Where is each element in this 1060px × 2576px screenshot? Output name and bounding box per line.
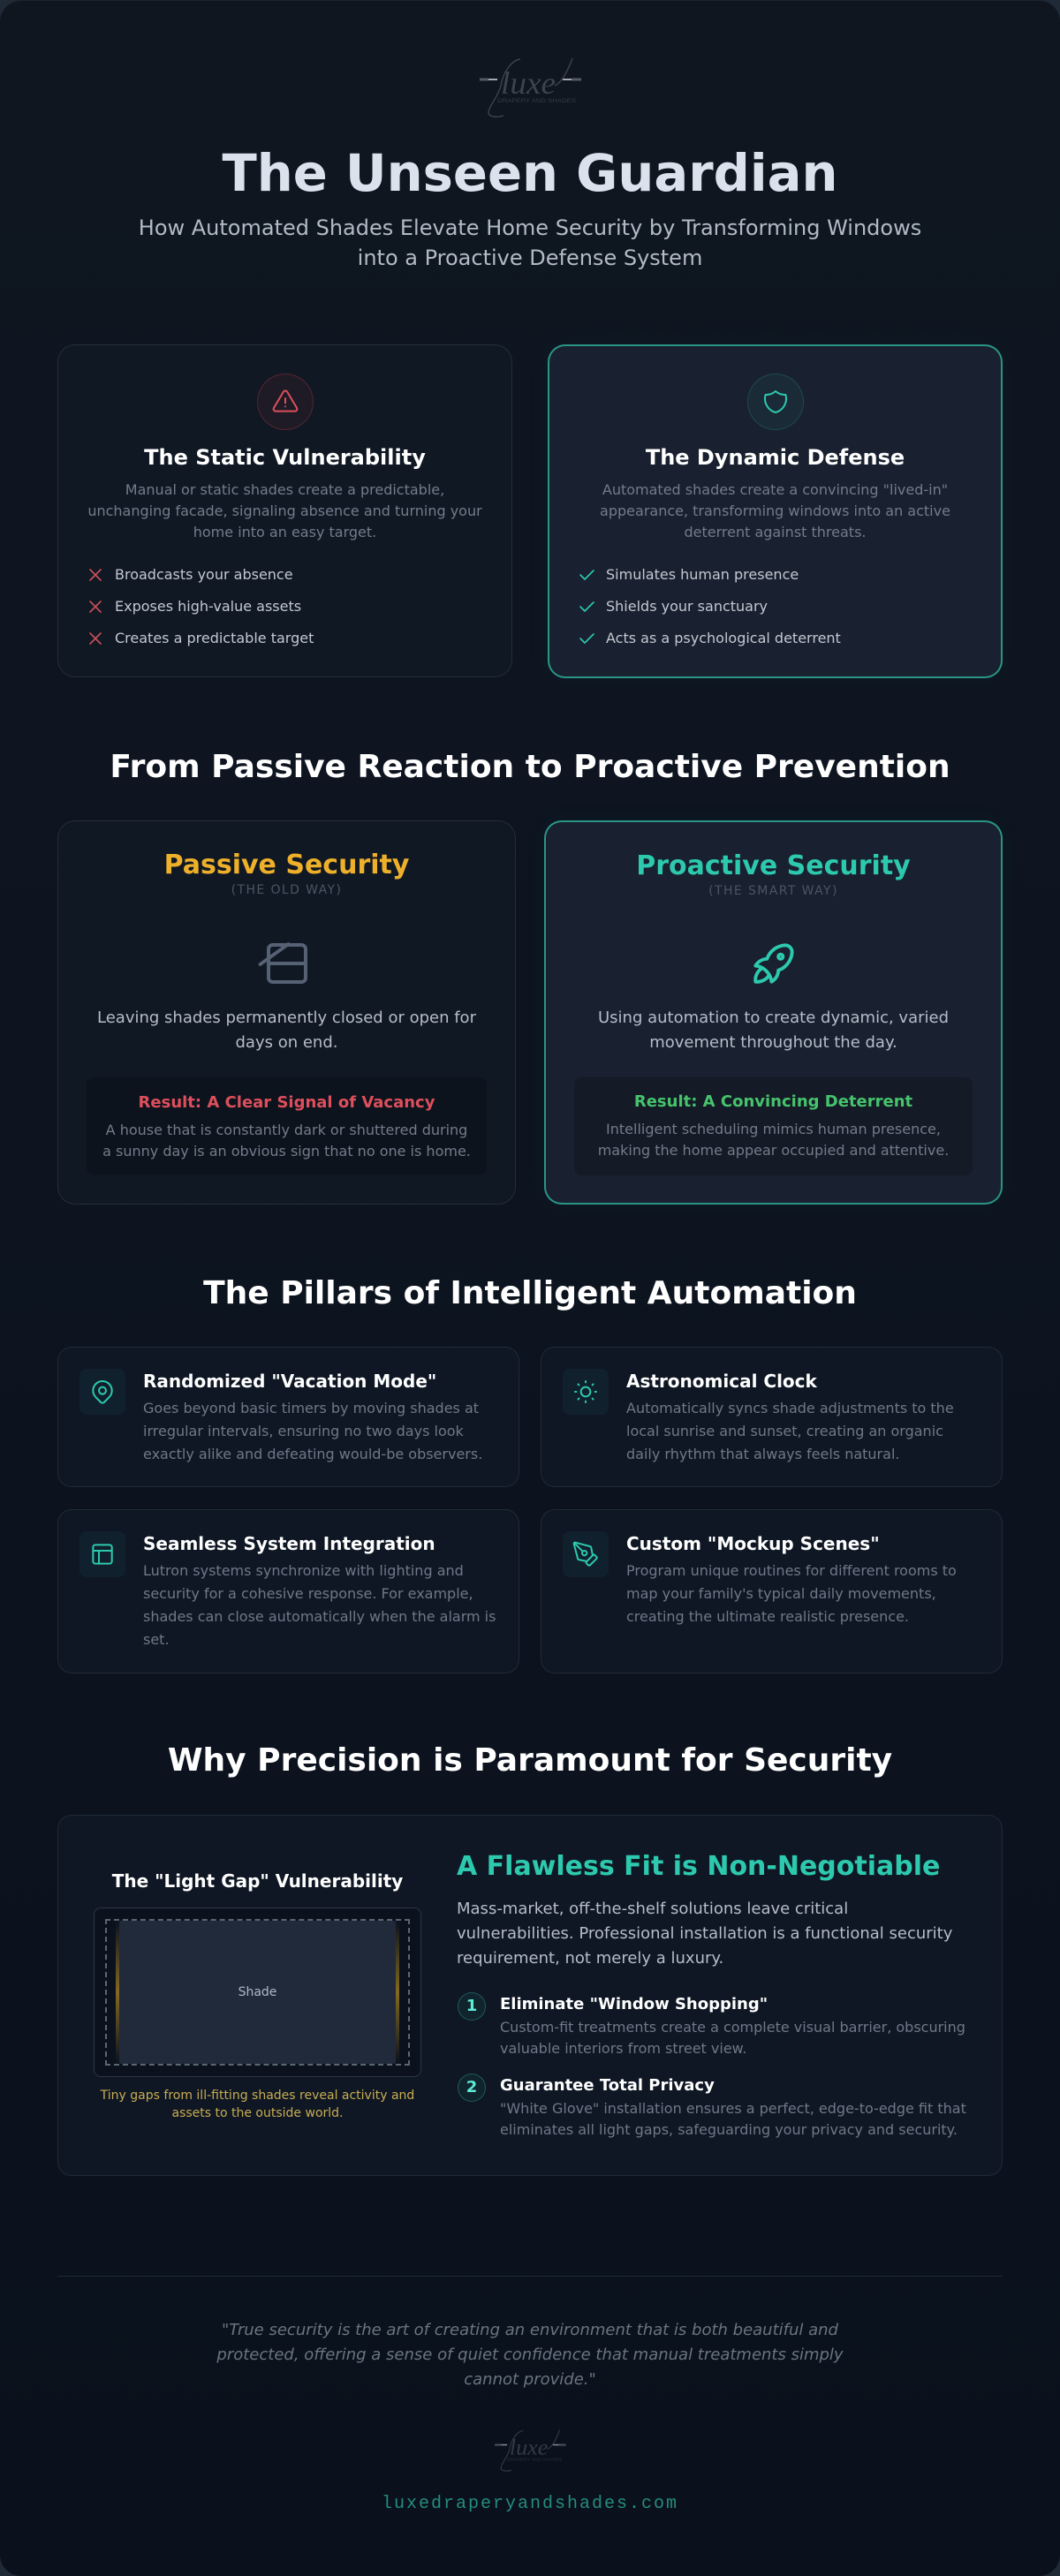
website url: luxedraperyandshades.com bbox=[382, 2494, 678, 2514]
icon: warning triangle bbox=[257, 374, 314, 430]
diagram: light gap bbox=[94, 1907, 421, 2077]
title: The Unseen Guardian bbox=[222, 144, 837, 203]
body text: Using automation to create dynamic, varied bbox=[598, 1008, 949, 1027]
subheading: (THE OLD WAY) bbox=[231, 883, 342, 897]
item text: valuable interiors from street view. bbox=[500, 2040, 746, 2057]
body text: Leaving shades permanently closed or open for bbox=[97, 1008, 476, 1027]
item title: Guarantee Total Privacy bbox=[500, 2076, 715, 2095]
icon: shield bbox=[747, 374, 804, 430]
description: shades can close automatically when the alarm is bbox=[143, 1608, 496, 1625]
item text: Custom-fit treatments create a complete visual barrier, obscuring bbox=[500, 2019, 965, 2036]
quote: cannot provide." bbox=[464, 2370, 596, 2389]
heading: Randomized "Vacation Mode" bbox=[143, 1371, 436, 1392]
item 2 bbox=[458, 2074, 966, 2138]
description bbox=[626, 1400, 954, 1462]
heading: Seamless System Integration bbox=[143, 1533, 435, 1554]
subheading: (THE SMART WAY) bbox=[708, 884, 838, 898]
panel: randomized vacation mode bbox=[57, 1347, 519, 1487]
description bbox=[143, 1562, 496, 1648]
number badge bbox=[458, 2074, 486, 2102]
description: Manual or static shades create a predictable, bbox=[125, 481, 444, 498]
logo: luxe footer bbox=[495, 2430, 566, 2472]
description bbox=[600, 481, 950, 540]
subtitle: How Automated Shades Elevate Home Security by Transforming Windows bbox=[139, 215, 921, 240]
icon: layout bbox=[80, 1531, 125, 1577]
body text bbox=[97, 1008, 476, 1052]
body text: days on end. bbox=[235, 1033, 337, 1052]
logo: luxe top bbox=[480, 58, 581, 117]
result box bbox=[87, 1077, 487, 1175]
light gap right bbox=[396, 1921, 399, 2064]
icon: shade window bbox=[258, 942, 307, 984]
quote: protected, offering a sense of quiet confidence that manual treatments simply bbox=[216, 2346, 844, 2364]
body text bbox=[598, 1008, 949, 1052]
icon: map pin bbox=[80, 1369, 125, 1415]
heading: A Flawless Fit is Non-Negotiable bbox=[457, 1851, 940, 1882]
shade: Shade bbox=[238, 1985, 276, 1999]
result text: making the home appear occupied and attentive. bbox=[598, 1142, 949, 1159]
description: local sunrise and sunset, creating an organic bbox=[626, 1423, 943, 1439]
description: exactly alike and defeating would-be observers. bbox=[143, 1446, 482, 1462]
caption: assets to the outside world. bbox=[171, 2106, 343, 2120]
description: irregular intervals, ensuring no two days look bbox=[143, 1423, 464, 1439]
icon: check bbox=[579, 570, 594, 580]
result text: Intelligent scheduling mimics human presence, bbox=[606, 1121, 941, 1137]
window frame bbox=[105, 1919, 410, 2066]
item title: Eliminate "Window Shopping" bbox=[500, 1995, 768, 2013]
description: creating the ultimate realistic presence. bbox=[626, 1608, 909, 1625]
panel: precision bbox=[57, 1815, 1003, 2176]
icon: check bbox=[579, 601, 594, 612]
caption: Tiny gaps from ill-fitting shades reveal activity and bbox=[101, 2089, 414, 2103]
description bbox=[87, 481, 482, 540]
list item: Exposes high-value assets bbox=[115, 598, 301, 615]
description: Program unique routines for different rooms to bbox=[626, 1562, 957, 1579]
body text: movement throughout the day. bbox=[649, 1033, 897, 1052]
result text bbox=[102, 1122, 471, 1160]
description: Goes beyond basic timers by moving shades at bbox=[143, 1400, 479, 1416]
panel: passive security bbox=[57, 820, 516, 1205]
number badge: 1 bbox=[466, 1997, 477, 2015]
icon: cross bbox=[89, 632, 102, 645]
item text: "White Glove" installation ensures a perfect, edge-to-edge fit that bbox=[500, 2100, 966, 2117]
item text: eliminates all light gaps, safeguarding your privacy and security. bbox=[500, 2121, 958, 2138]
result box bbox=[574, 1077, 973, 1175]
section heading: From Passive Reaction to Proactive Prevention bbox=[110, 749, 950, 785]
logo: luxe top: luxe bbox=[501, 65, 556, 101]
list item: Broadcasts your absence bbox=[115, 566, 293, 583]
icon: rocket bbox=[753, 943, 794, 984]
paragraph: Mass-market, off-the-shelf solutions leave critical bbox=[457, 1900, 848, 1918]
panel: custom mockup scenes bbox=[541, 1509, 1003, 1673]
list item: Acts as a psychological deterrent bbox=[606, 630, 841, 646]
description bbox=[143, 1400, 482, 1462]
caption bbox=[101, 2089, 414, 2120]
description: deterrent against threats. bbox=[684, 524, 866, 540]
quote: "True security is the art of creating an environment that is both beautiful and bbox=[222, 2321, 838, 2339]
result title: Result: A Clear Signal of Vacancy bbox=[139, 1093, 435, 1112]
paragraph bbox=[457, 1900, 952, 1968]
heading: Custom "Mockup Scenes" bbox=[626, 1533, 880, 1554]
section heading: The Pillars of Intelligent Automation bbox=[203, 1275, 857, 1311]
result title: Result: A Convincing Deterrent bbox=[634, 1092, 912, 1111]
result text bbox=[598, 1121, 949, 1159]
heading: Passive Security bbox=[164, 850, 409, 880]
quote bbox=[216, 2321, 844, 2389]
number badge bbox=[458, 1992, 486, 2021]
panel: seamless system integration bbox=[57, 1509, 519, 1673]
subtitle bbox=[139, 215, 921, 270]
result text: a sunny day is an obvious sign that no one is home. bbox=[102, 1143, 471, 1160]
description: Automated shades create a convincing "lived-in" bbox=[602, 481, 948, 498]
icon: sun bbox=[563, 1369, 609, 1415]
description: map your family's typical daily movements, bbox=[626, 1585, 936, 1602]
icon: pen nib bbox=[563, 1531, 609, 1577]
paragraph: requirement, not merely a luxury. bbox=[457, 1949, 723, 1968]
light gap left bbox=[116, 1921, 119, 2064]
logo: luxe footer: luxe bbox=[510, 2436, 548, 2460]
description: unchanging facade, signaling absence and turning your bbox=[87, 502, 482, 519]
subtitle: into a Proactive Defense System bbox=[358, 246, 702, 270]
icon: cross bbox=[89, 601, 102, 613]
heading: Astronomical Clock bbox=[626, 1371, 817, 1392]
heading: The Dynamic Defense bbox=[646, 445, 905, 470]
description: security for a cohesive response. For example, bbox=[143, 1585, 473, 1602]
item 1 bbox=[458, 1992, 965, 2057]
list item: Simulates human presence bbox=[606, 566, 799, 583]
heading: The Static Vulnerability bbox=[144, 445, 426, 470]
panel: the static vulnerability bbox=[57, 344, 512, 677]
logo: luxe top: DRAPERY AND SHADES bbox=[497, 98, 577, 104]
number badge: 2 bbox=[466, 2078, 477, 2096]
list item: Shields your sanctuary bbox=[606, 598, 768, 615]
description: daily rhythm that always feels natural. bbox=[626, 1446, 899, 1462]
icon: cross bbox=[89, 569, 102, 581]
description: home into an easy target. bbox=[193, 524, 376, 540]
section heading: Why Precision is Paramount for Security bbox=[168, 1742, 892, 1779]
description: Automatically syncs shade adjustments to the bbox=[626, 1400, 954, 1416]
result text: A house that is constantly dark or shuttered during bbox=[106, 1122, 467, 1138]
description: Lutron systems synchronize with lighting and bbox=[143, 1562, 464, 1579]
panel: astronomical clock bbox=[541, 1347, 1003, 1487]
description bbox=[626, 1562, 957, 1625]
panel: the dynamic defense bbox=[548, 344, 1003, 678]
logo: luxe footer: DRAPERY AND SHADES bbox=[507, 2458, 562, 2462]
heading: Proactive Security bbox=[636, 850, 911, 881]
list item: Creates a predictable target bbox=[115, 630, 314, 646]
item text bbox=[500, 2019, 965, 2057]
shade bbox=[119, 1921, 396, 2064]
icon: check bbox=[579, 633, 594, 644]
description: set. bbox=[143, 1631, 170, 1648]
diagram heading: The "Light Gap" Vulnerability bbox=[112, 1870, 403, 1892]
description: appearance, transforming windows into an active bbox=[600, 502, 950, 519]
paragraph: vulnerabilities. Professional installation is a functional security bbox=[457, 1924, 952, 1943]
panel: proactive security bbox=[544, 820, 1003, 1205]
item text bbox=[500, 2100, 966, 2138]
